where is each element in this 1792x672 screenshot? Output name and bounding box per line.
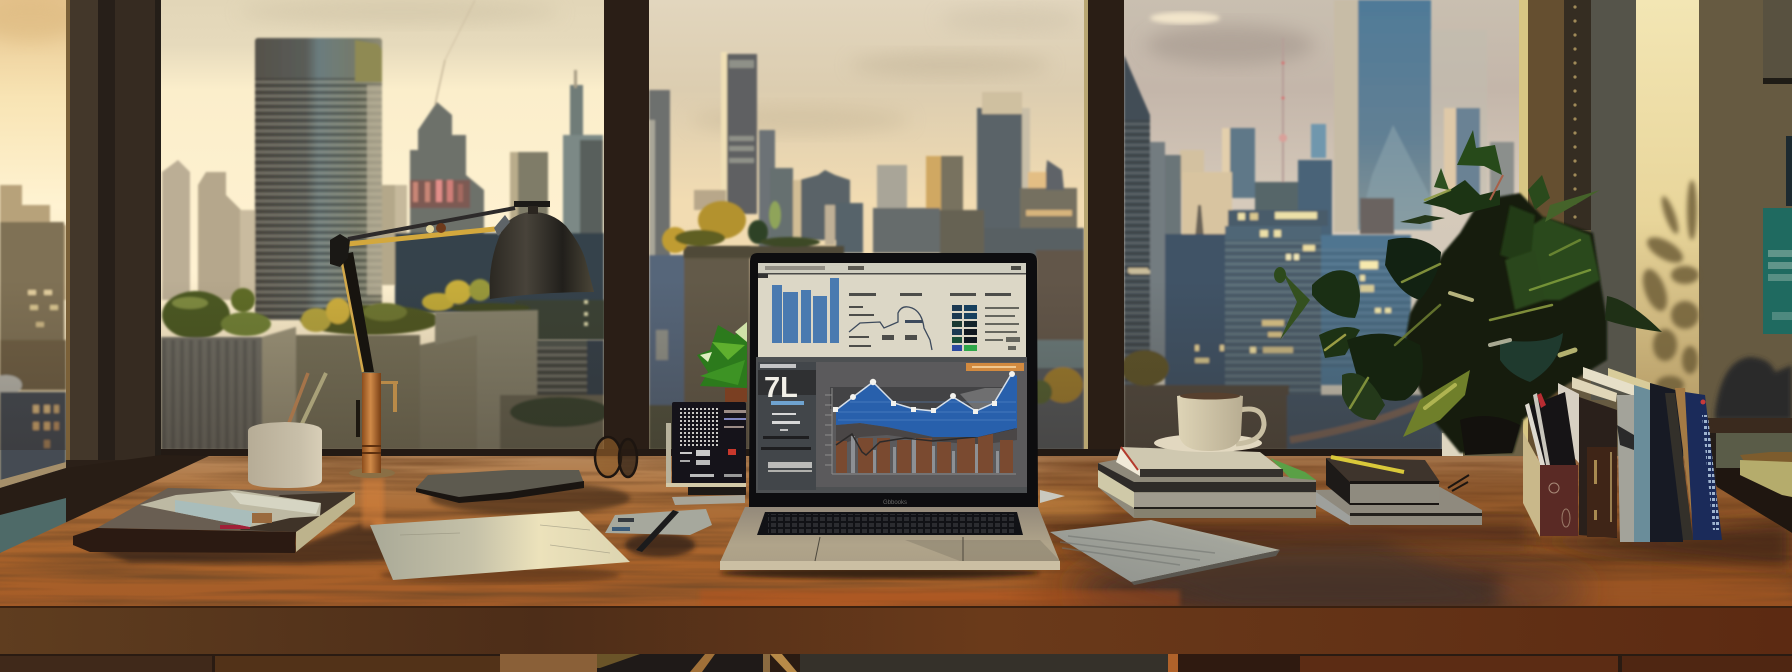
- sky: [0, 0, 1520, 490]
- laptop top panel: [758, 263, 1026, 357]
- mid band: [836, 423, 1017, 447]
- third window buildings: [649, 52, 1084, 450]
- y axis: [825, 388, 1016, 474]
- top notebook: [1326, 458, 1440, 505]
- bar chart: [772, 278, 839, 343]
- display stand: [666, 423, 746, 505]
- cream book tops: [1572, 367, 1651, 402]
- laptop screen lower panel: [756, 357, 1027, 493]
- lower lamp arm: [341, 252, 374, 437]
- sunlit upper foliage: [1500, 205, 1600, 310]
- coffee: [1180, 392, 1240, 400]
- desk top: [0, 456, 1792, 607]
- pen nibs: [1448, 475, 1469, 491]
- blue area: [836, 373, 1017, 437]
- plant pot: [1442, 420, 1523, 457]
- lamp base disc: [349, 468, 395, 478]
- wall shelf: [1763, 0, 1792, 84]
- window frames and mullions: [0, 0, 1523, 553]
- sheet of paper: [370, 511, 630, 580]
- wood grain: [0, 456, 1792, 607]
- KPI value: 7L: [764, 372, 798, 404]
- big round leaves: [1274, 238, 1662, 455]
- lamp post: [362, 373, 381, 473]
- pencil case: [140, 490, 321, 527]
- left window buildings: [0, 185, 66, 490]
- area and line chart: [816, 362, 1027, 487]
- teal poster: [1763, 208, 1792, 334]
- book organizer: [1523, 367, 1722, 542]
- white page: [1558, 383, 1579, 463]
- lamp handle: [381, 381, 398, 412]
- brown columns: [836, 424, 1013, 473]
- small desk plant: [697, 322, 747, 402]
- laptop bezel: [749, 253, 1038, 507]
- document on desk: [1050, 520, 1280, 585]
- right wall with sunlight: [1519, 0, 1792, 540]
- desk: [0, 450, 1792, 672]
- second window buildings: [162, 0, 605, 340]
- papers in holder: [1525, 392, 1576, 465]
- cast shadows on desk: [90, 450, 1792, 626]
- coffee cup on book stack: [1098, 392, 1316, 518]
- network diagram: [849, 293, 1011, 350]
- fourth window buildings: [1121, 0, 1514, 450]
- laptop: [720, 253, 1060, 570]
- magazine holder: [1523, 432, 1578, 537]
- line markers: [833, 371, 1015, 414]
- foliage mass: [1403, 193, 1607, 453]
- sunlit leaf streaks: [1325, 190, 1590, 408]
- plant: [1274, 130, 1662, 455]
- laptop logo text: Gbbooks: [883, 500, 907, 506]
- desk lamp: [330, 201, 594, 478]
- below desk drawers and legs: [0, 654, 1792, 672]
- left window sill and lower wall: [0, 455, 209, 553]
- saucer: [1154, 434, 1262, 452]
- dark bag on back shelf: [1715, 357, 1792, 420]
- back shelf: [1700, 418, 1792, 534]
- left mullion: [66, 0, 161, 460]
- window sill: [161, 449, 1523, 457]
- lamp joint: [330, 234, 350, 267]
- mug body: [1177, 393, 1243, 451]
- outdoor city skyline seen through the windows: [0, 0, 1520, 490]
- book stack right with pencil: [1316, 457, 1482, 525]
- card device and pen: [605, 509, 712, 552]
- notebook with pencil case: [73, 488, 355, 553]
- keyboard: [757, 512, 1023, 535]
- line series: [836, 373, 1012, 411]
- dark desk mat: [416, 470, 584, 503]
- small book on back shelf: [1740, 452, 1792, 497]
- trackpad edges: [815, 537, 963, 561]
- small dashboard display: [666, 402, 746, 505]
- dark binder: [1579, 397, 1617, 538]
- yellow pencil: [1331, 457, 1404, 472]
- status table: [952, 305, 1020, 351]
- spiral notebook: [1116, 447, 1283, 477]
- centre left mullion: [604, 0, 649, 456]
- book stack left: [1098, 458, 1316, 518]
- eyeglasses: [595, 437, 637, 477]
- lamp shade: [490, 201, 594, 299]
- dusk tint on lower city: [0, 302, 1444, 450]
- sunlight patch: [1636, 0, 1699, 400]
- KPI column: [758, 362, 816, 490]
- plant shadow on wall: [1638, 180, 1699, 394]
- centre right mullion: [1084, 0, 1124, 456]
- mug handle: [1236, 409, 1264, 444]
- spine row: [1617, 383, 1722, 542]
- laptop base: [720, 507, 1060, 570]
- rooftop bushes left: [162, 279, 530, 339]
- desk front edge: [0, 607, 1792, 654]
- bush on middle rooftop: [662, 201, 844, 258]
- pencil cup: [248, 373, 326, 488]
- laptop cables: [1040, 490, 1065, 503]
- upper leaves: [1400, 130, 1600, 224]
- orange tag: [966, 363, 1024, 371]
- dark trend line: [836, 428, 1015, 455]
- upper lamp arms: [348, 208, 515, 244]
- grey poles: [851, 436, 999, 473]
- foreground rooftops left: [161, 300, 610, 450]
